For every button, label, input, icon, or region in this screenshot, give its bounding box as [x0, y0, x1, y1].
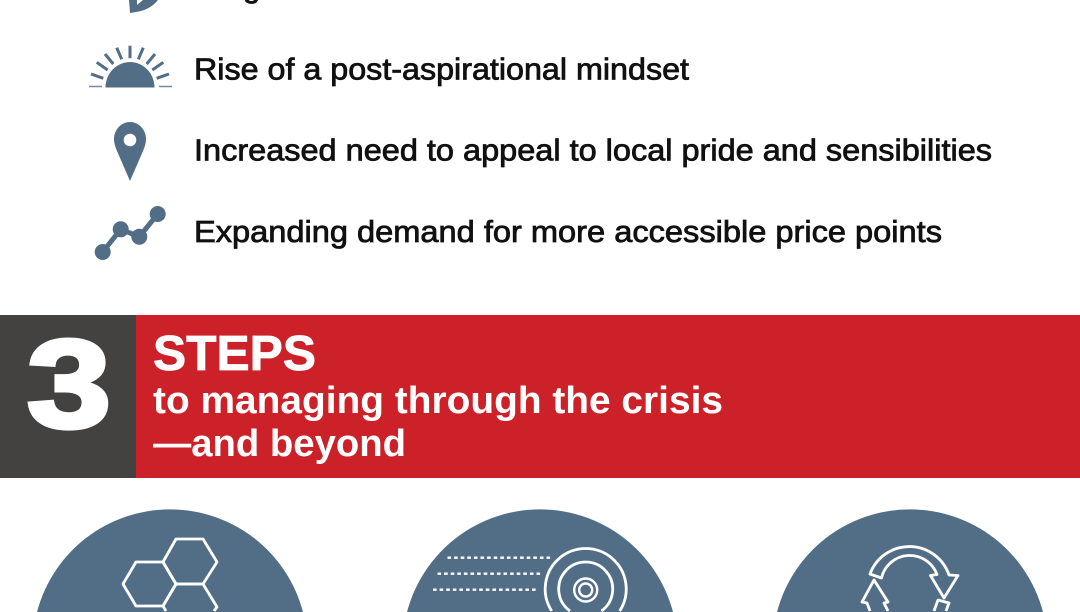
- icon: rising sun: [89, 46, 172, 88]
- step 1 circle with hexagons icon: [37, 509, 303, 612]
- subheading line 1: to managing through the crisis: [153, 380, 723, 422]
- list item: local pride: Increased need to appeal to local pride and sensibilities: [194, 133, 992, 168]
- step 3 circle with cycle arrows icon: [777, 509, 1043, 612]
- step 2 circle with target icon: [407, 509, 673, 612]
- icon: line chart: [95, 206, 166, 260]
- heading: steps: STEPS: [153, 327, 316, 381]
- icon: map pin: [114, 122, 146, 181]
- subheading line 2: —and beyond: [153, 423, 406, 465]
- banner background: red: [136, 315, 1080, 478]
- number panel: [0, 315, 136, 478]
- list item: accessible price points: Expanding demand for more accessible price points: [194, 214, 942, 249]
- number 3: 3: [27, 315, 111, 454]
- banner: 3 steps: [0, 315, 1080, 478]
- list item: post-aspirational mindset: Rise of a post-aspirational mindset: [194, 52, 689, 86]
- icon: leaf (cropped): [129, 0, 158, 13]
